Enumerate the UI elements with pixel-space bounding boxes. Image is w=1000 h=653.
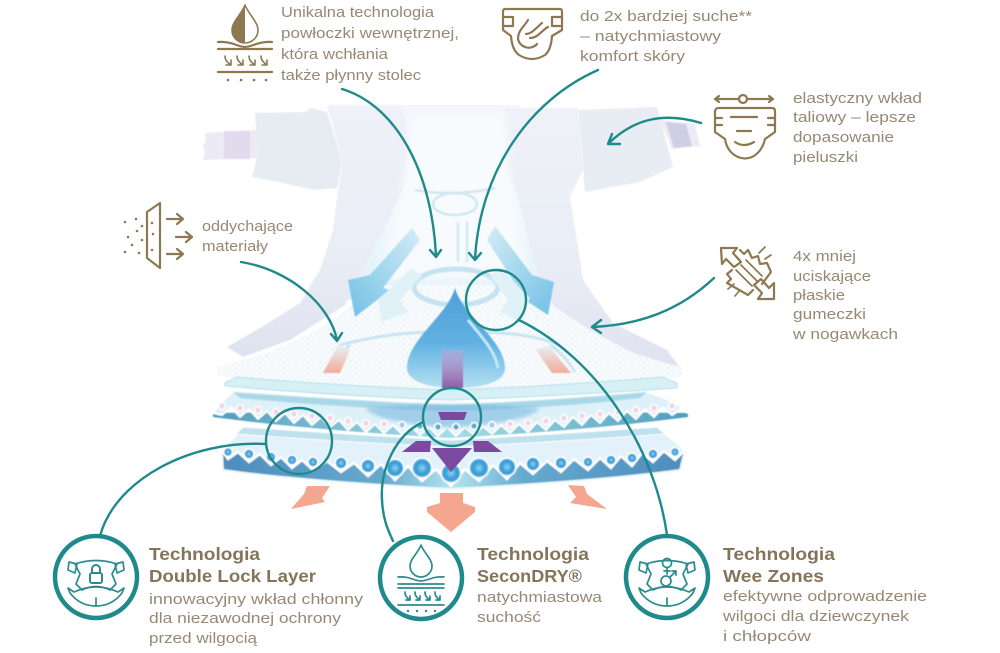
salmon arrow right [568,485,607,509]
left blue flow arrow [348,228,420,317]
text: inner coating: powłoczki wewnętrznej, [281,25,459,42]
arrow: breathable [241,262,342,341]
text: Double Lock Layer: Technologia [149,544,260,564]
text: breathable: materiały [202,238,269,255]
text: flat elastics: 4x mniej [793,248,856,265]
callout: SeconDRY lens and line [382,388,481,541]
badge: SeconDRY [380,537,462,619]
text: inner coating: także płynny stolec [281,67,422,84]
text: SeconDRY: suchość [477,609,542,626]
text: waist: elastyczny wkład [793,90,922,107]
text: SeconDRY: natychmiastowa [477,589,603,606]
callout: Wee Zones lens and line [466,270,667,535]
text: Wee Zones: Technologia [723,544,835,564]
text: Double Lock Layer: innowacyjny wkład chłonny [149,591,364,608]
layer 4 top edge [236,427,665,447]
layer 4 upper pad [222,427,685,486]
arrow: leg elastics [592,278,714,333]
text: inner coating [281,4,459,84]
sheet channel curve [325,332,575,372]
centre embossed rings [414,188,498,305]
text: SeconDRY: Technologia [477,544,589,564]
centre white wetness area [378,115,530,280]
layer 4 blue band [222,450,685,489]
text: flat elastics [792,248,898,343]
text: waist [793,90,922,166]
text: Wee Zones [722,544,927,645]
text: drier: komfort skóry [580,48,686,65]
purple arrows in core [402,412,502,472]
left leg cuff [227,105,409,357]
text: breathable [202,218,293,255]
icon: breathable materials [124,203,192,268]
text: SeconDRY [477,544,603,626]
text: flat elastics: płaskie [793,287,845,304]
water drop [407,288,505,388]
badge: Wee Zones [626,536,708,618]
text: Double Lock Layer [149,544,364,647]
salmon arrow left [291,486,330,509]
text: waist: pieluszki [793,149,858,166]
dotted top sheet [217,285,683,395]
right fastening tab [660,120,700,149]
pale inner arrows [378,268,530,322]
text: Double Lock Layer: Double Lock Layer [149,566,316,586]
text: SeconDRY: SeconDRY® [477,566,582,586]
right blue flow arrow [487,226,554,315]
diaper inner body [335,105,575,300]
icon: flat elastics [721,247,774,299]
text: Wee Zones: Wee Zones [723,566,824,586]
icon: elastic waist diaper [715,95,775,158]
right side panel [578,107,673,192]
text: Double Lock Layer: dla niezawodnej ochrony [149,610,342,627]
arrow: drier [469,70,598,260]
layer 3 upper pad [213,392,688,436]
text: inner coating: która wchłania [281,46,389,63]
purple downward flow arrow [442,350,463,388]
text: drier [580,8,752,65]
text: waist: taliowy – lepsze [793,109,916,126]
layer 3 top shading [233,392,647,411]
icon: drop over coating [218,5,272,80]
absorbent layers stack [213,377,688,489]
text: drier: do 2x bardziej suche** [580,8,752,25]
text: flat elastics: gumeczki [793,306,866,323]
text: Wee Zones: efektywne odprowadzenie [723,588,927,605]
text: waist: dopasowanie [793,129,894,146]
left side panel [252,108,342,190]
text: drier: – natychmiastowy [580,28,722,45]
callout: Double Lock Layer lens and line [100,408,332,536]
text: Wee Zones: i chłopców [723,628,811,645]
salmon arrow centre [427,493,475,532]
layer 4 blue beads [224,448,680,483]
icon: diaper with drop [503,9,562,59]
text: breathable: oddychające [202,218,293,235]
text: Double Lock Layer: przed wilgocią [149,630,258,647]
text: Wee Zones: wilgoci dla dziewczynek [722,608,910,625]
drop highlight [468,320,498,368]
badge: Double Lock Layer [55,536,137,618]
layer 2 [225,377,677,400]
layer 3 pink beads [218,402,676,430]
arrow: inner coating [342,89,441,257]
text: inner coating: Unikalna technologia [281,4,435,21]
text: flat elastics: w nogawkach [792,326,898,343]
arrow: waist [608,118,701,144]
diaper illustration [203,105,700,532]
layer 3 teal band [213,410,688,438]
text: flat elastics: uciskające [793,268,871,285]
right leg cuff [503,108,680,368]
layer 3 speckled centre [365,404,540,428]
left fastening tab [203,130,258,160]
salmon side arrows [323,345,571,373]
